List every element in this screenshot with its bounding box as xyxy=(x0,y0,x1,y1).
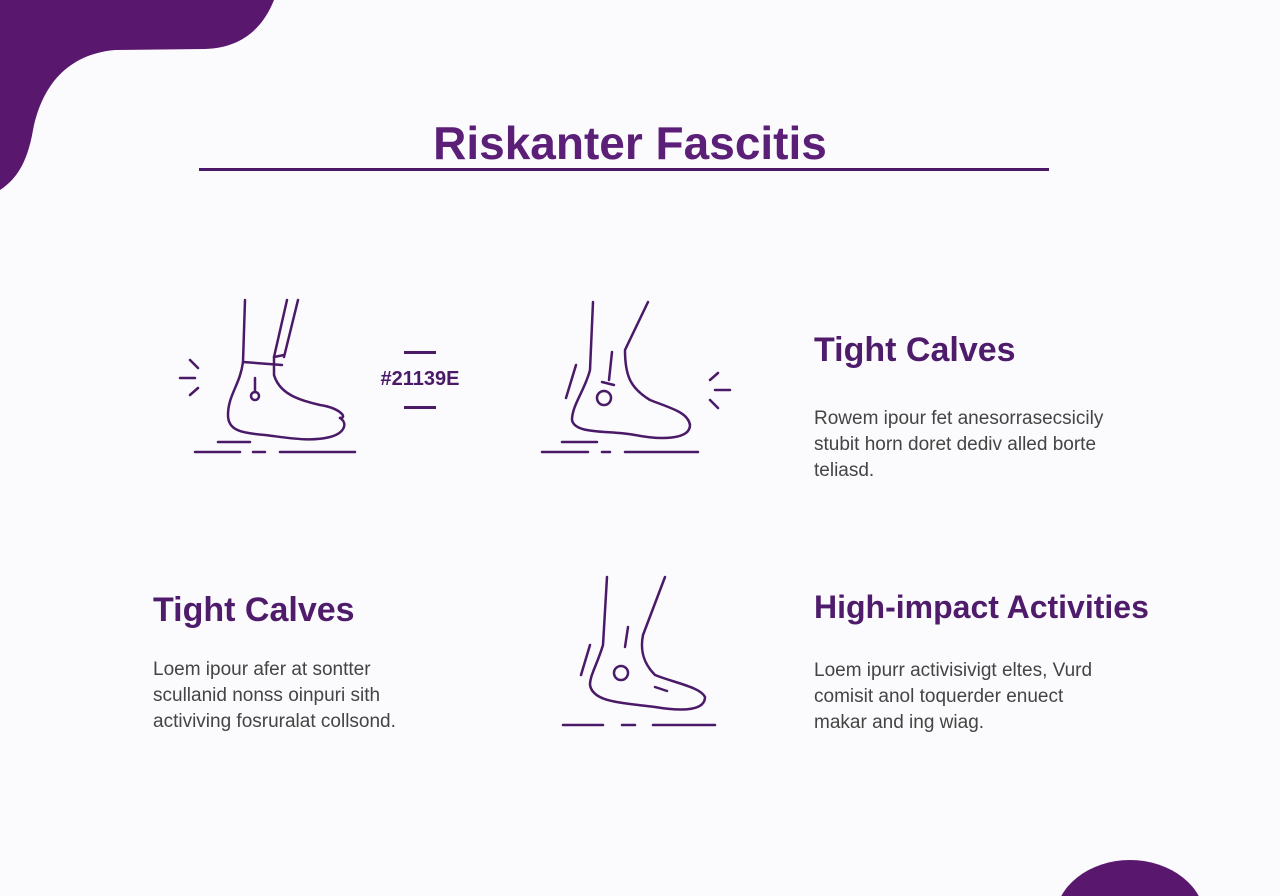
icon: foot 1 xyxy=(178,298,356,454)
panel: tight calves (top right): stubit horn doret dediv alled borte xyxy=(814,434,1096,455)
panel: tight calves (bottom left) xyxy=(153,591,396,732)
title: Riskanter Fascitis xyxy=(433,117,827,169)
panel: tight calves (bottom left): activiving fosruralat collsond. xyxy=(153,711,396,732)
icon: foot 3 xyxy=(562,576,716,726)
panel: high-impact activities: comisit anol toquerder enuect xyxy=(814,686,1063,707)
panel: tight calves (top right): teliasd. xyxy=(814,460,874,481)
panel: tight calves (top right) xyxy=(814,331,1104,481)
panel: tight calves (bottom left): Loem ipour afer at sontter xyxy=(153,659,371,680)
icon: foot 2 xyxy=(540,300,732,454)
label: color code xyxy=(380,351,459,409)
decorative blob bottom-right xyxy=(1061,860,1199,896)
decorative blob top-left xyxy=(0,0,274,190)
panel: high-impact activities: High-impact Activities xyxy=(814,589,1149,625)
label: color code: #21139E xyxy=(380,368,459,390)
panel: tight calves (bottom left): scullanid nonss oinpuri sith xyxy=(153,685,380,706)
panel: tight calves (top right): Tight Calves xyxy=(814,331,1016,369)
panel: high-impact activities: makar and ing wiag. xyxy=(814,712,984,733)
panel: tight calves (top right): Rowem ipour fet anesorrasecsicily xyxy=(814,408,1103,429)
panel: high-impact activities: Loem ipurr activisivigt eltes, Vurd xyxy=(814,660,1092,681)
title underline xyxy=(199,168,1049,171)
panel: tight calves (bottom left): Tight Calves xyxy=(153,591,355,629)
panel: high-impact activities xyxy=(814,589,1149,733)
